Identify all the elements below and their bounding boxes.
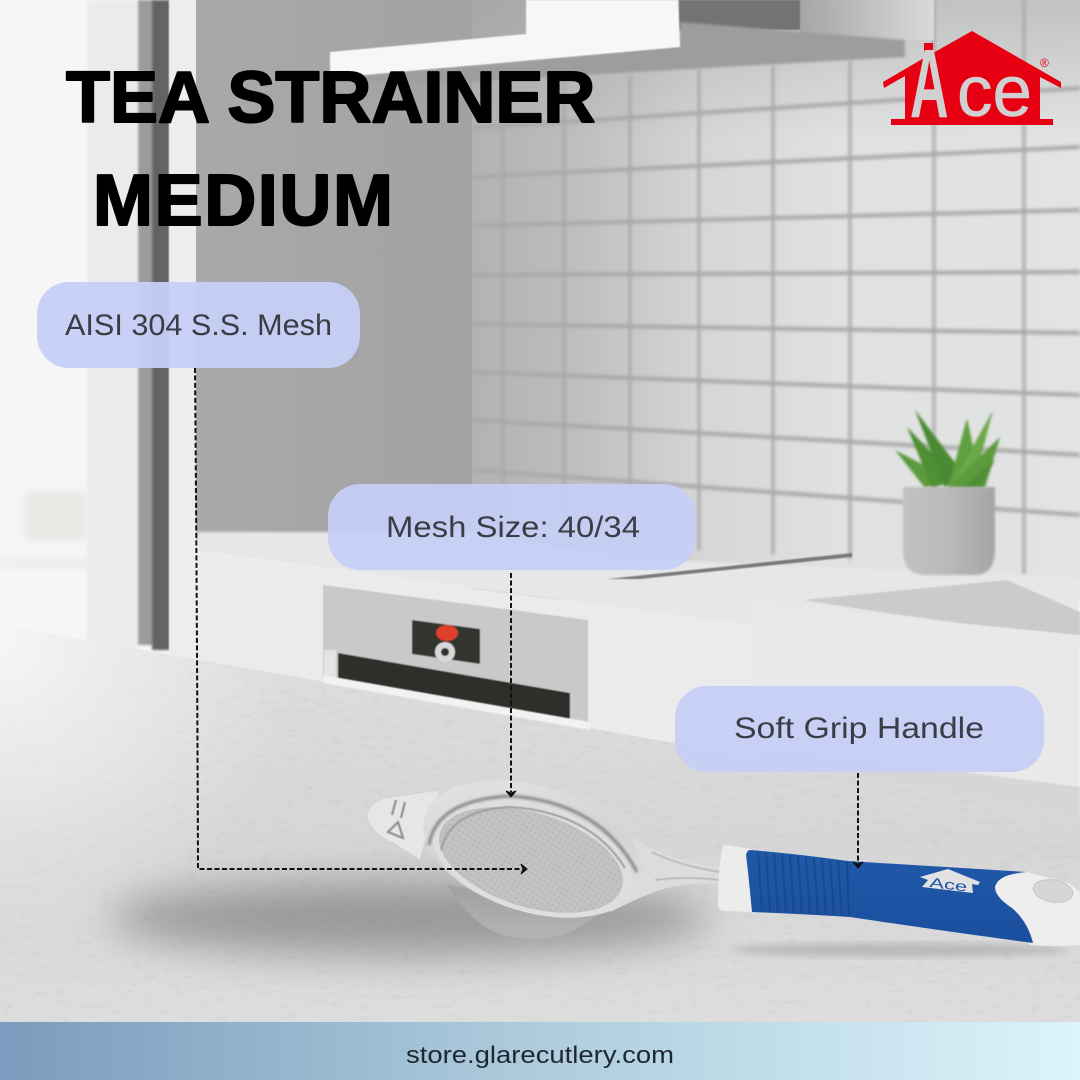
callout pill <box>37 282 360 368</box>
range hood <box>330 0 934 83</box>
logo on handle <box>920 869 980 895</box>
logo wordmark <box>910 29 1032 138</box>
stem streak <box>652 852 720 880</box>
oven side tab <box>324 650 336 680</box>
title line 2: MEDIUM <box>93 161 395 241</box>
shading under hood <box>472 0 1080 140</box>
handle shadow on counter <box>730 943 1070 957</box>
callout text: Soft Grip Handle <box>734 712 984 745</box>
outer rim <box>407 756 659 942</box>
footer url: store.glarecutlery.com <box>406 1042 674 1069</box>
strainer shadow on counter <box>110 880 710 956</box>
door frame: dark <box>152 0 170 650</box>
oven <box>323 585 588 735</box>
logo letters ce: ce <box>957 52 1032 132</box>
hole opening <box>1031 877 1075 905</box>
tab engraving <box>388 800 405 838</box>
oven dial <box>435 642 455 662</box>
callout: handle <box>675 686 1044 772</box>
light vertical panel <box>169 0 197 680</box>
back counter surface <box>197 532 1080 640</box>
faint blurred shelf objects <box>0 492 92 566</box>
white handle end <box>990 872 1080 946</box>
plant pot <box>903 487 995 575</box>
left hook tab <box>367 790 440 860</box>
soft panel beside frame <box>87 0 137 660</box>
footer band <box>0 1022 1080 1080</box>
product: tea strainer <box>367 756 1080 946</box>
arrow: grip to handle <box>853 773 863 868</box>
cooktop edge <box>607 553 852 579</box>
small logo text: Ace <box>929 874 969 895</box>
potted plant <box>895 410 1000 575</box>
lower cabinets <box>197 552 760 770</box>
oven display <box>412 620 480 664</box>
sink lower shade <box>755 745 1080 830</box>
door frame: mid grey <box>138 0 154 645</box>
counter front edge highlight <box>323 675 590 730</box>
callout text: AISI 304 S.S. Mesh <box>65 309 332 342</box>
title line 1: TEA STRAINER <box>66 58 595 138</box>
plant leaves <box>895 410 1000 488</box>
counter speckle texture <box>0 620 1080 1024</box>
hood grey underside <box>330 22 905 83</box>
grey wall <box>196 0 486 540</box>
rim dark arc <box>429 796 637 872</box>
white hood body <box>330 0 680 78</box>
oven red indicator <box>436 625 458 641</box>
tiled wall <box>472 0 1080 600</box>
oven door gap <box>338 653 570 730</box>
callout text: Mesh Size: 40/34 <box>386 511 640 544</box>
bright left window area <box>0 0 170 680</box>
sink face <box>755 603 1080 790</box>
registered mark: ® <box>1040 56 1049 70</box>
dark duct section <box>679 0 803 30</box>
sink basin <box>803 580 1080 640</box>
oven panel <box>323 585 588 735</box>
counter left fade <box>0 625 300 1024</box>
logo house <box>883 31 1061 125</box>
light duct section <box>800 0 934 40</box>
white collar <box>718 845 755 912</box>
arrow: mesh material to mesh <box>195 368 527 874</box>
handle stem <box>610 838 722 912</box>
footer background <box>0 1022 1080 1080</box>
mesh <box>426 787 636 933</box>
blue grip <box>746 850 1033 943</box>
callout pill <box>328 484 696 570</box>
plastic handle <box>718 845 1080 946</box>
grip ribs <box>758 851 849 916</box>
callout: mesh size <box>328 484 696 570</box>
title <box>66 58 595 241</box>
mesh upper arc <box>441 807 625 868</box>
callout: mesh material <box>37 282 360 368</box>
logo letter A: A <box>910 29 949 138</box>
strainer bowl <box>447 885 600 939</box>
arrow: mesh size to rim <box>506 573 516 797</box>
sink <box>755 580 1080 830</box>
countertop <box>0 625 1080 1024</box>
callout pill <box>675 686 1044 772</box>
inner rim <box>418 776 646 940</box>
hanging hole <box>1031 877 1075 905</box>
tile grid lines <box>472 0 1080 575</box>
Ace logo <box>883 29 1061 138</box>
small house outline <box>920 869 980 893</box>
